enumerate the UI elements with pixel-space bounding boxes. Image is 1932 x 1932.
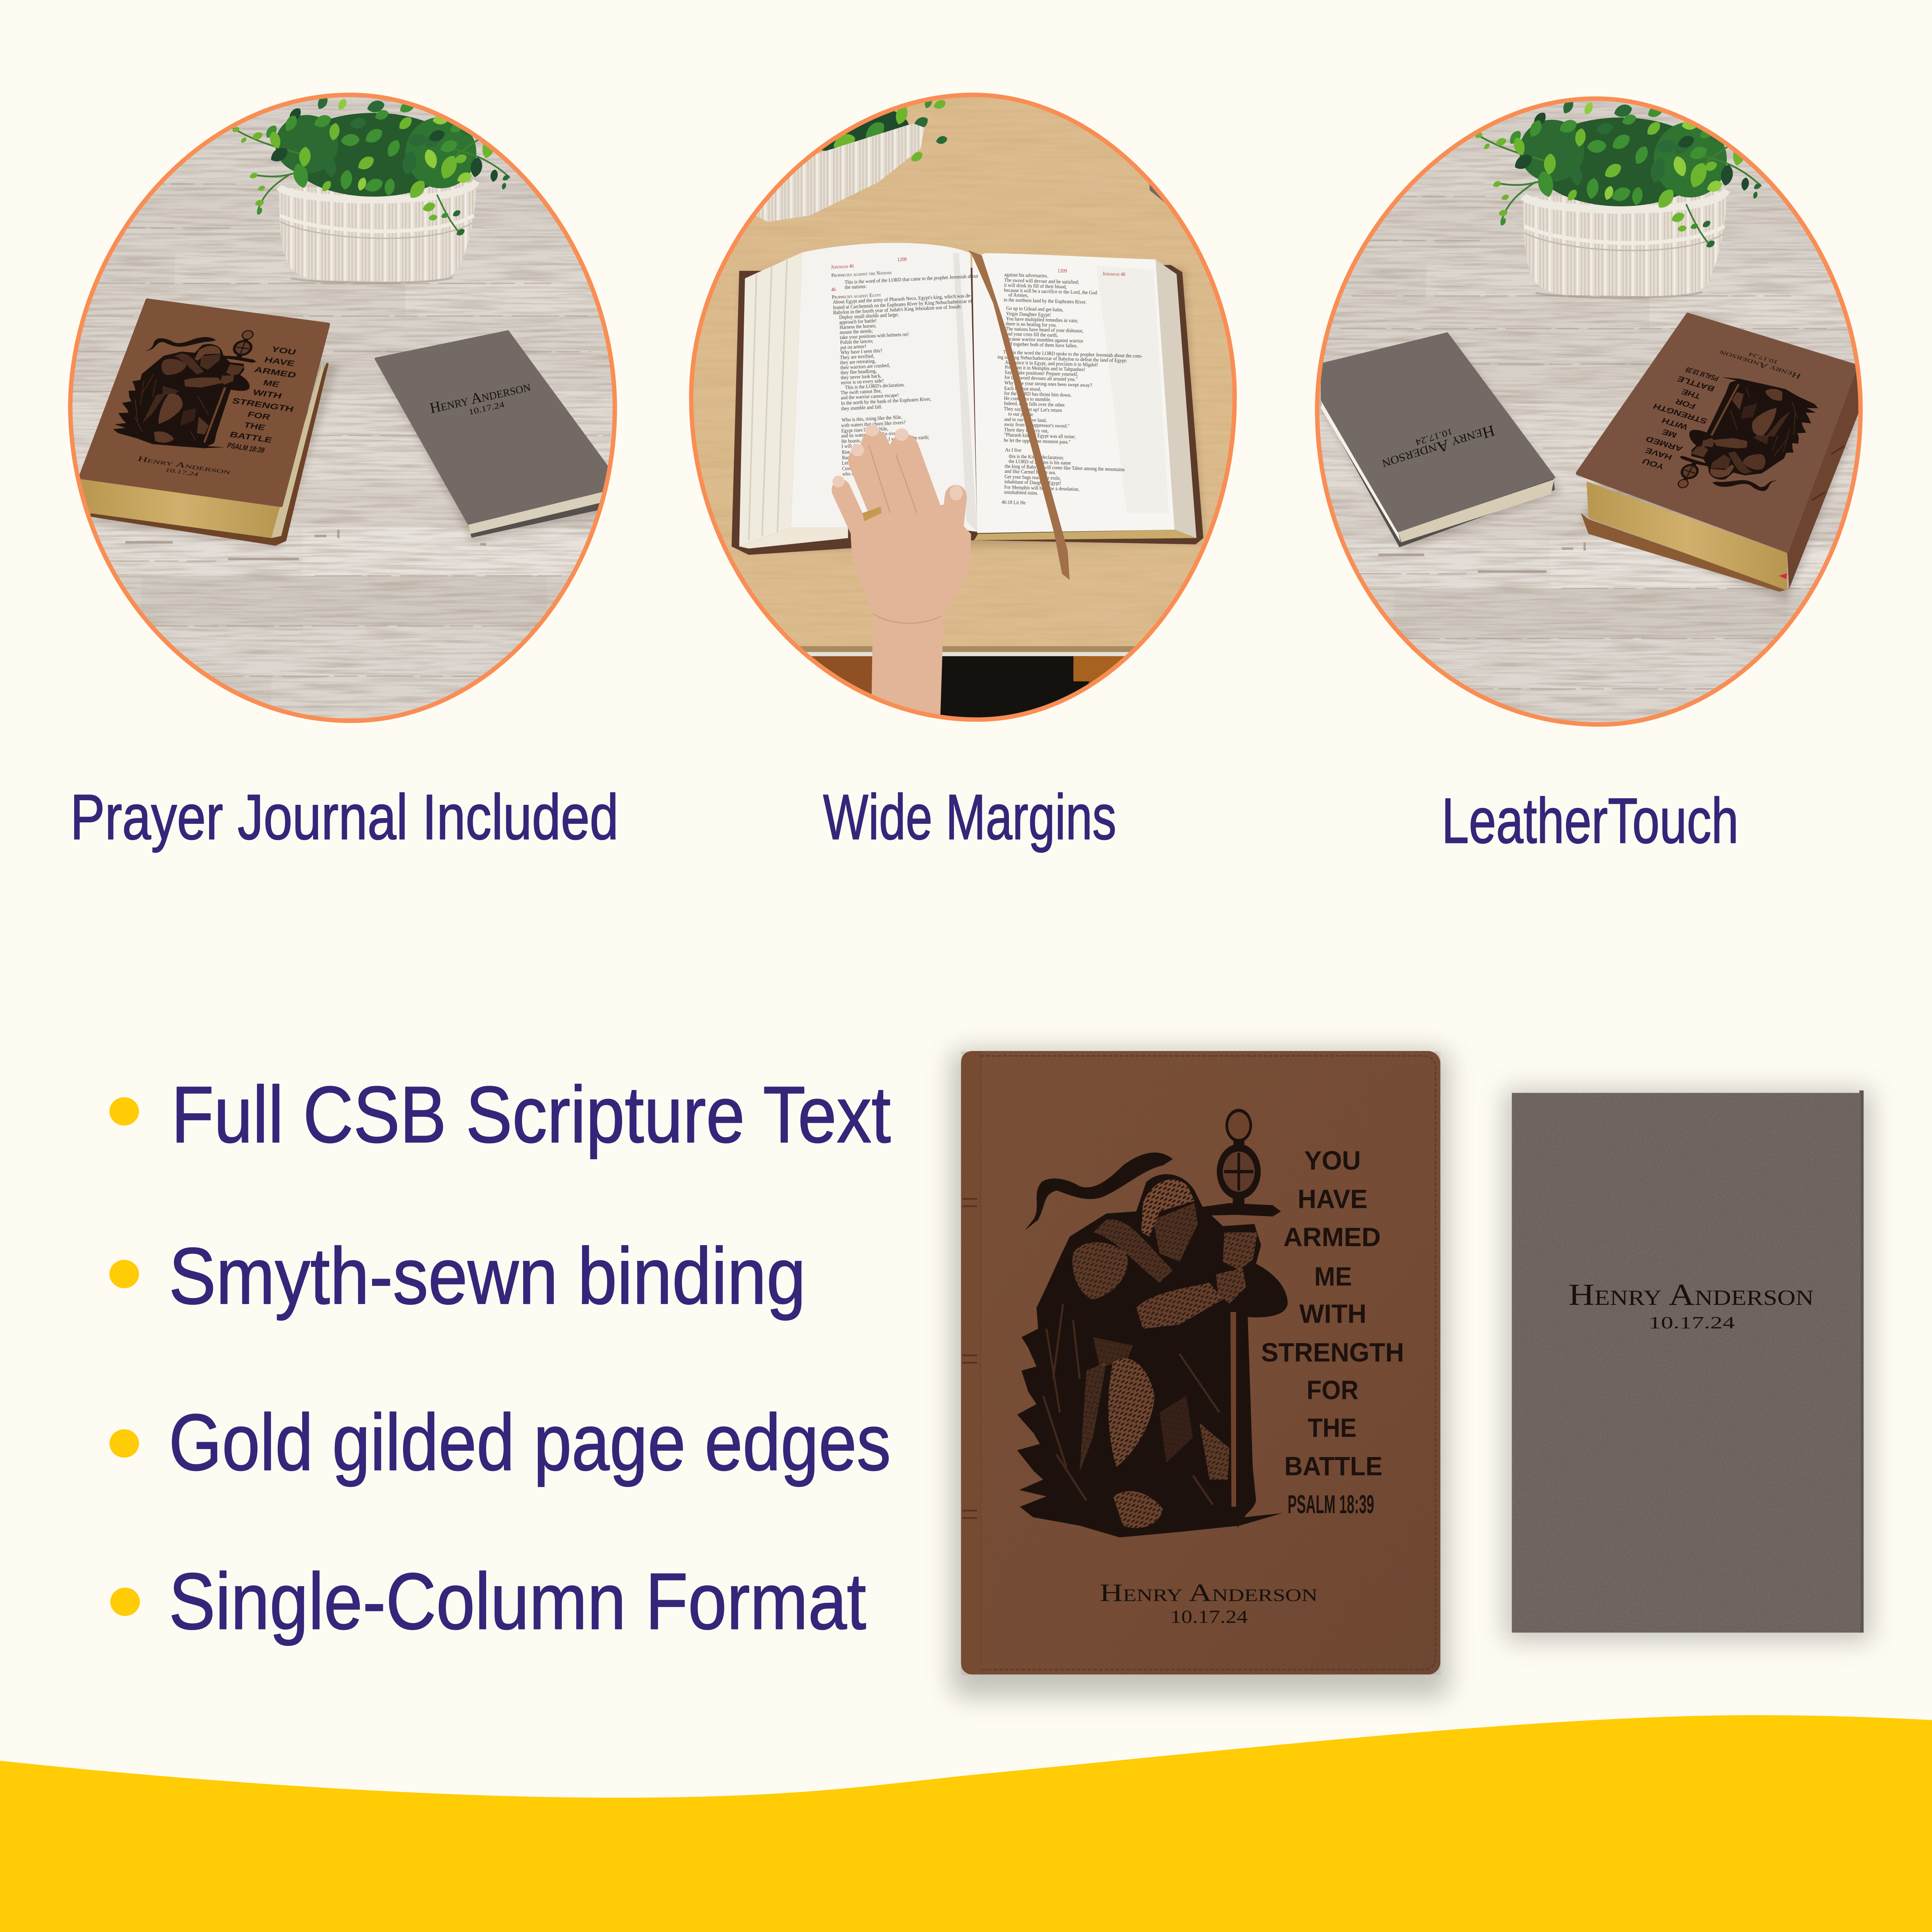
icon: potted plant [1474, 97, 1762, 298]
text block: right Bible page: Announce it in Egypt, and proclaim it in Migdol! [1005, 359, 1098, 368]
caption: leathertouch: LeatherTouch [1442, 785, 1738, 857]
text: journal name: Henry Anderson [1568, 1278, 1814, 1312]
photo: grey prayer journal: Henry Anderson [429, 378, 532, 417]
text block: left Bible page: 46 [831, 287, 836, 293]
text block: right Bible page: You have multiplied remedies in vain; [1006, 316, 1078, 323]
text block: name and date: Henry Anderson [1100, 1579, 1318, 1607]
text block: right Bible page: it will drink its fill of their blood, [1004, 282, 1067, 290]
caption: prayer journal: Prayer Journal Included [70, 782, 619, 853]
photo: open Bible [731, 243, 1203, 580]
text block: right Bible page: Jeremiah 46 [1102, 271, 1126, 277]
text block: left Bible page: Prophecies against the Nations [831, 270, 892, 278]
text block: right Bible page: and together both of them have fallen. [1005, 341, 1078, 349]
text block: verse engraving: THE [1308, 1413, 1357, 1443]
footer wave [0, 1715, 1932, 1932]
icon: potted plant [231, 94, 510, 283]
bullet list [109, 1070, 891, 1646]
text block: right Bible page: They say, "Get up! Let's return [1004, 406, 1062, 413]
photo: brown engraved Bible: HAVE [263, 355, 296, 368]
text block: left Bible page: Let the warriors march out [842, 458, 893, 466]
photo: grey prayer journal flipped: 10.17.24 [1414, 426, 1454, 448]
product: grey prayer journal front cover [1504, 1089, 1872, 1641]
photo: brown engraved Bible: YOU [270, 345, 298, 357]
text block: right Bible page: 46:18 Lit He [1002, 499, 1026, 505]
text block: right Bible page: inhabitant of Daughter Egypt! [1004, 479, 1061, 486]
text block: right Bible page: Each has not stood, [1004, 385, 1041, 392]
text block: right Bible page: and your cries fill the earth, [1005, 331, 1058, 338]
text block: left Bible page: who are armed with shields [842, 469, 895, 477]
text block: right Bible page: in the northern land by the Euphrates River. [1003, 297, 1087, 305]
text block: left Bible page: they flee headlong, [840, 368, 877, 376]
text block: left Bible page: they stumble and fall. [841, 404, 882, 412]
illustration: kneeling knight [1017, 1111, 1287, 1537]
text block: right Bible page: The sword will devour and be satisfied; [1004, 277, 1079, 285]
text block: left Bible page: About Egypt and the army of Pharaoh Neco, Egypt's king, which was de- [833, 293, 972, 305]
text block: right Bible page: there is no healing for you. [1006, 321, 1057, 328]
text block: right Bible page: the king of Babylon will come like Tabor among the mountains [1005, 463, 1125, 473]
text block: right Bible page: ing of King Nebuchadnezzar of Babylon to defeat the land of Egypt: [997, 354, 1127, 364]
text block: verse engraving: FOR [1307, 1376, 1359, 1405]
text block: verse engraving [1261, 1146, 1404, 1519]
photo: hand on page [832, 425, 971, 734]
photo: brown engraved Bible flipped [1578, 315, 1861, 592]
photo: brown engraved Bible: BATTLE [228, 430, 274, 444]
text block: left Bible page: terror is on every side! [841, 378, 884, 386]
text block: left Bible page: they are retreating, [840, 358, 876, 366]
text block: left Bible page: Who is this, rising like the Nile, [842, 414, 902, 423]
text block: name and date: 10.17.24 [1170, 1607, 1248, 1627]
text block: right Bible page: against his adversaries. [1004, 272, 1048, 279]
text block: left Bible page: mount the steeds; [840, 328, 873, 335]
text block: right Bible page: Proclaim it in Memphis and in Tahpanhes! [1005, 364, 1085, 372]
text block: left Bible page: Polish the lances; [840, 338, 873, 345]
photo: brown engraved Bible: WITH [252, 388, 283, 400]
photo: brown engraved Bible flipped: THE [1680, 387, 1702, 400]
photo: grey prayer journal [376, 332, 607, 537]
text block: left Bible page: I will destroy cities [842, 442, 878, 449]
text block: right Bible page: uninhabited ruins. [1004, 489, 1038, 496]
text block: right Bible page: He continues to stumble. [1004, 395, 1051, 402]
text block: left Bible page: Rise up, you cavalry! [842, 447, 883, 455]
icon: plant pot in corner [745, 95, 1182, 222]
table edge and floor [676, 646, 1275, 734]
text block: right Bible page: away from the oppressor's sword." [1004, 421, 1070, 429]
text block: left Bible page: Race furiously, you chariots! [842, 452, 897, 461]
text block: right Bible page: 1209 [1058, 268, 1067, 274]
panel: wide margins photo [676, 77, 1275, 734]
photo: brown engraved Bible flipped: ME [1660, 427, 1679, 439]
photo: brown engraved Bible flipped: YOU [1641, 457, 1666, 471]
text block: right Bible page: This is the word the LORD spoke to the prophet Jeremiah about the com- [1003, 349, 1143, 359]
text block: right Bible page: he let the opportune moment pass." [1004, 437, 1071, 445]
text block: left Bible page: feated at Carchemish on the Euphrates River by King Nebuchadnezzar of [833, 298, 972, 310]
text block: right Bible page: for the sword devours all around you." [1005, 374, 1078, 382]
photo: brown engraved Bible flipped: Henry Anderson [1718, 349, 1803, 380]
photo: brown engraved Bible flipped: 10.17.24 [1748, 351, 1779, 365]
text block: left Bible page: approach for battle! [839, 318, 877, 325]
panel: prayer journal photo [68, 93, 617, 723]
photo: grey prayer journal flipped [1321, 333, 1555, 547]
text block: left Bible page: Jeremiah 46 [831, 263, 854, 270]
photo: brown engraved Bible: FOR [246, 410, 272, 422]
caption: wide margins: Wide Margins [823, 782, 1116, 853]
photo: brown engraved Bible flipped: ARMED [1644, 434, 1684, 453]
text block: right Bible page: "Pharaoh king of Egypt was all noise; [1004, 432, 1076, 440]
photo: brown engraved Bible flipped: BATTLE [1676, 374, 1716, 393]
text block: left Bible page: Egypt rises like the Nile, [841, 426, 888, 434]
text block: left Bible page: and the warrior cannot escape! [841, 392, 899, 401]
text block: verse engraving: WITH [1299, 1299, 1366, 1329]
photo: brown engraved Bible flipped: PSALM 18:39 [1684, 365, 1720, 382]
text block: left Bible page: with waters that churn like rivers? [841, 420, 906, 428]
text block: right Bible page: because it will be a sacrifice to the Lord, the God [1004, 287, 1097, 296]
text block: verse engraving: YOU [1304, 1146, 1361, 1175]
text block: name and date [1100, 1579, 1318, 1627]
photo: brown engraved Bible flipped: WITH [1660, 416, 1689, 431]
text block: left Bible page: He boasts, "I will go up, I will cover the earth; [841, 434, 929, 444]
text block: right Bible page: for the LORD has thrust him down. [1004, 390, 1071, 398]
text: journal date: 10.17.24 [1649, 1313, 1735, 1332]
photo: brown engraved Bible: Henry Anderson [136, 454, 232, 476]
text block: left Bible page: 1208 [897, 257, 907, 262]
text block: left Bible page: put on armor! [840, 344, 866, 350]
photo: brown engraved Bible flipped: FOR [1674, 397, 1697, 410]
text block: right Bible page: Go up to Gilead and get balm, [1006, 305, 1063, 313]
text block: left Bible page: Why have I seen this? [840, 348, 883, 355]
text block: left Bible page: and its waters churn like rivers. [841, 430, 901, 439]
text block: right Bible page: For Memphis will become a desolation, [1004, 484, 1080, 492]
text block: left Bible page: Babylon in the fourth year of Judah's King Jehoiakim son of Josiah: [833, 304, 962, 315]
text block: left Bible page: Prophecies against Egypt [832, 292, 881, 300]
photo: brown engraved Bible: ARMED [253, 365, 298, 379]
photo: brown engraved Bible [80, 300, 328, 544]
text block: left Bible page [830, 253, 986, 477]
text block: right Bible page: Virgin Daughter Egypt! [1006, 311, 1051, 318]
photo: grey prayer journal flipped: Henry Anderson [1381, 422, 1497, 474]
text block: right Bible page: of Armies, [1009, 292, 1029, 298]
photo: brown engraved Bible: 10.17.24 [164, 467, 199, 478]
bullet: single column: Single-Column Format [169, 1556, 866, 1646]
product: brown Bible front cover [951, 1050, 1449, 1698]
text block: right Bible page: The nations have heard of your dishonor, [1006, 326, 1083, 334]
text block: right Bible page: There they will cry out, [1004, 427, 1049, 434]
photo: grey prayer journal: 10.17.24 [468, 400, 505, 417]
text block: verse engraving: ME [1314, 1262, 1352, 1292]
text block: left Bible page: The swift cannot flee, [840, 388, 882, 396]
text block: right Bible page: this is the King's declaration; [1009, 453, 1064, 461]
bullet: gilded edges: Gold gilded page edges [169, 1397, 891, 1487]
text block: right Bible page: As I live [1005, 447, 1022, 453]
text block: verse engraving: BATTLE [1284, 1452, 1383, 1481]
photo: brown engraved Bible: PSALM 18:39 [226, 441, 266, 455]
text block: left Bible page: they never look back, [841, 373, 881, 381]
text block: left Bible page: This is the LORD's declaration. [845, 382, 905, 390]
text block: right Bible page: and like Carmel by the sea. [1005, 468, 1056, 475]
text block: right Bible page [994, 266, 1145, 509]
photo: brown engraved Bible: ME [262, 378, 281, 389]
text block: right Bible page: Indeed, each falls over the other. [1004, 400, 1066, 408]
text block: left Bible page: the nations: [845, 284, 867, 290]
text block: verse engraving: PSALM 18:39 [1287, 1490, 1374, 1519]
bullet: scripture text: Full CSB Scripture Text [171, 1070, 891, 1159]
text block: left Bible page: They are terrified, [840, 353, 874, 361]
text block: right Bible page: to our people [1008, 411, 1033, 417]
text block: right Bible page: the LORD of Armies is his name [1009, 458, 1071, 466]
photo: brown engraved Bible: STRENGTH [231, 396, 295, 413]
bullet: binding: Smyth-sewn binding [169, 1231, 806, 1321]
text block: left Bible page: Harness the horses; [839, 323, 876, 330]
text block: right Bible page: Why have your strong ones been swept away? [1004, 380, 1092, 388]
text block: right Bible page: Say, "Take positions! Prepare yourself, [1005, 369, 1078, 377]
text block: right Bible page: Get your bags ready for exile, [1004, 474, 1061, 481]
text block: left Bible page: their warriors are crushed, [840, 362, 890, 371]
text block: left Bible page: Deploy small shields and large; [839, 312, 899, 320]
text block: left Bible page: In the north by the bank of the Euphrates River, [841, 396, 931, 406]
text block: verse engraving: ARMED [1283, 1223, 1381, 1252]
text block: verse engraving: STRENGTH [1261, 1338, 1404, 1367]
panel: LeatherTouch photo [1294, 77, 1894, 747]
photo: brown engraved Bible flipped: STRENGTH [1652, 401, 1709, 425]
photo: brown engraved Bible: THE [243, 420, 267, 432]
text block: verse engraving: HAVE [1298, 1185, 1367, 1214]
text block: right Bible page: because warrior stumbles against warrior [1005, 336, 1083, 344]
text block: left Bible page: This is the word of the LORD that came to the prophet Jeremiah about [844, 273, 978, 285]
icon: ribbon marker [968, 250, 1070, 580]
text block: left Bible page: take your positions with helmets on! [840, 332, 909, 340]
text block: right Bible page: and to our native land, [1004, 416, 1047, 423]
photo: brown engraved Bible flipped: HAVE [1644, 446, 1674, 461]
text block: left Bible page: Cush and Put, [842, 464, 869, 471]
